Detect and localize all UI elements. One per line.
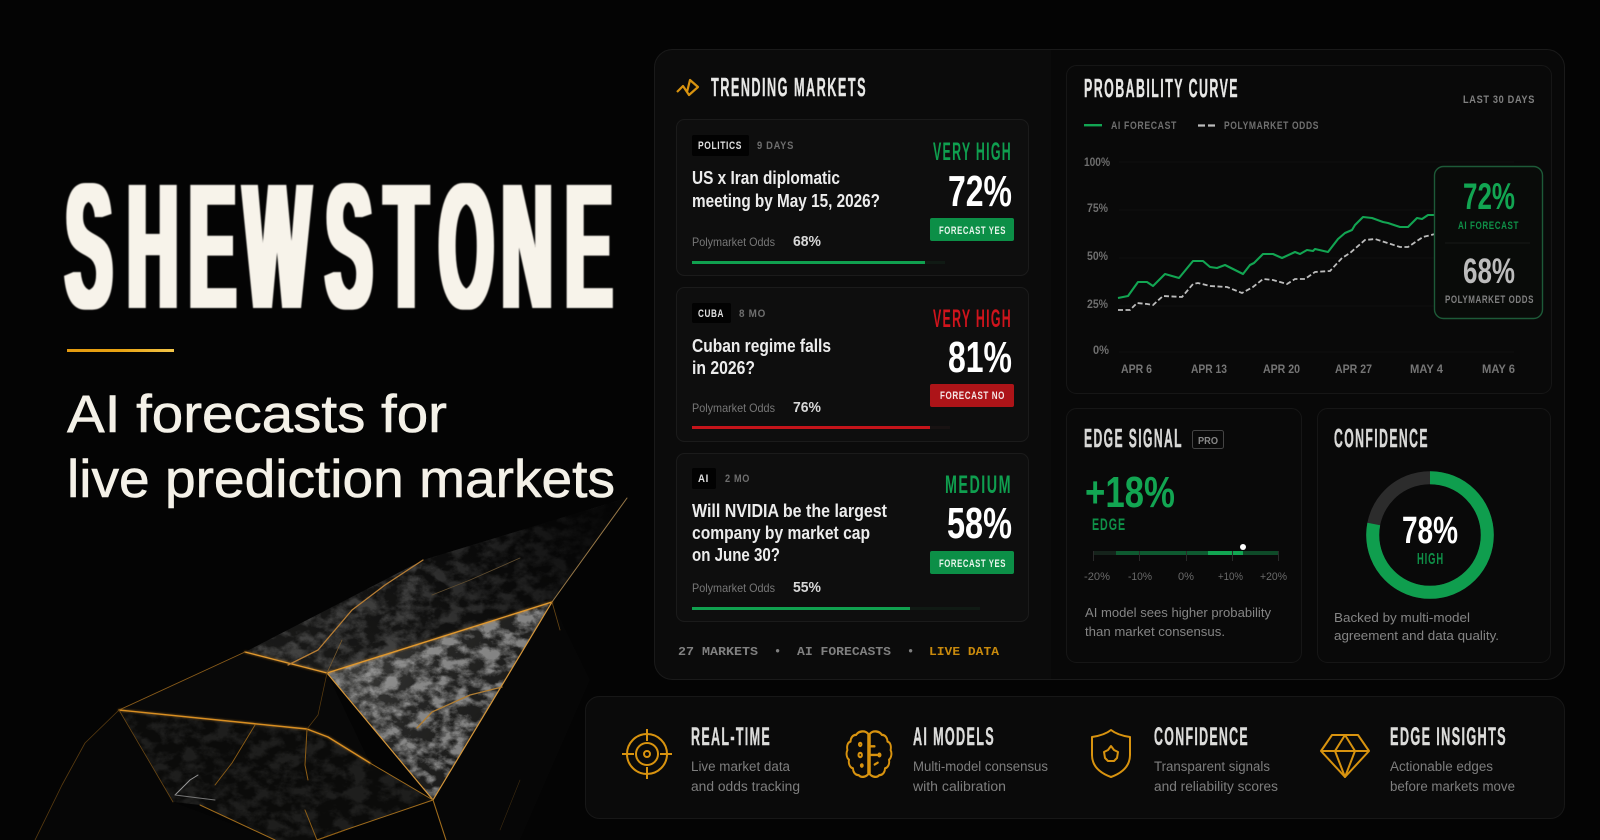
panel: trending markets: TRENDING MARKETS [711,72,867,102]
footer status line: AI FORECASTS [797,645,891,659]
title: SHEWSTONE: SHEWSTONE [66,146,612,346]
card: US x Iran [676,120,1028,276]
card: Cuba: 76% [793,399,821,416]
edge scale: +20% [1260,571,1287,583]
icon: trend zigzag [677,80,698,95]
card: NVIDIA: 2 MO [725,473,750,485]
card: NVIDIA: on June 30? [692,545,780,565]
feature: AI models: AI MODELS [913,723,995,751]
legend: AI FORECAST [1111,120,1177,132]
panel: edge signal [1066,408,1302,662]
line chart: APR 13 [1191,364,1227,376]
card: Cuba: CUBA [698,308,724,320]
panel: probability curve [1066,66,1552,394]
line chart: APR 27 [1335,364,1372,376]
legend [1084,120,1319,132]
icon: target [622,729,672,779]
card: Cuba: 81% [948,333,1012,382]
card: US x Iran: Polymarket Odds [692,235,775,249]
confidence description [1334,610,1499,643]
footer status line [678,645,1000,659]
edge scale: 0% [1178,571,1194,583]
feature: real-time [622,723,800,794]
panel: trending markets [676,72,1028,659]
card: Cuba: VERY HIGH [933,305,1012,333]
card: Cuba: FORECAST NO [940,390,1005,402]
card: US x Iran: 68% [793,233,821,250]
footer status line: • [907,645,914,659]
callout: current values: 68% [1463,252,1515,291]
card: US x Iran: VERY HIGH [933,138,1012,166]
illustration: cracked obsidian stone with gold veins [35,495,630,840]
feature: real-time: and odds tracking [691,779,800,794]
callout: current values: AI FORECAST [1458,220,1519,232]
edge scale: -10% [1128,571,1152,583]
line chart: MAY 6 [1482,364,1515,376]
tagline [67,385,615,509]
card: NVIDIA: MEDIUM [945,471,1012,499]
line chart: 100% [1084,157,1110,169]
feature: confidence: and reliability scores [1154,779,1278,794]
card: NVIDIA: AI [698,473,709,485]
callout: current values: POLYMARKET ODDS [1445,294,1534,306]
tagline: live prediction markets [67,450,615,509]
main dashboard panel [654,50,1564,680]
panel: confidence [1318,408,1550,662]
card: NVIDIA: Polymarket Odds [692,581,775,595]
feature: AI models: with calibration [912,779,1006,794]
series: polymarket odds [1118,234,1435,310]
line chart: 0% [1093,345,1109,357]
card: NVIDIA: 55% [793,579,821,596]
callout: current values: 72% [1463,176,1515,217]
card: Cuba: in 2026? [692,358,755,378]
line chart: 50% [1087,251,1108,263]
card: Cuba: Cuban regime falls [692,336,831,356]
icon: brain [847,731,891,777]
card: Cuba: Polymarket Odds [692,401,775,415]
legend: POLYMARKET ODDS [1224,120,1319,132]
panel: probability curve: PROBABILITY CURVE [1084,73,1239,103]
card: US x Iran: 72% [948,167,1012,216]
accent rule [67,349,174,352]
card: NVIDIA: Will NVIDIA be the largest [692,501,887,521]
edge description: AI model sees higher probability [1085,605,1271,620]
line chart [1084,157,1515,376]
confidence description: Backed by multi-model [1334,610,1470,625]
donut gauge 78%: 78% [1402,510,1458,552]
card: US x Iran: meeting by May 15, 2026? [692,191,880,211]
confidence description: agreement and data quality. [1334,628,1499,643]
feature: real-time: Live market data [691,759,790,774]
panel: feature strip [586,696,1564,818]
edge scale [1084,544,1287,583]
card: NVIDIA: 58% [947,499,1012,548]
feature: edge insights: before markets move [1390,779,1515,794]
donut gauge 78%: HIGH [1417,551,1444,568]
edge label: EDGE [1092,515,1126,534]
edge scale: -20% [1084,571,1110,583]
feature: AI models [847,723,1048,794]
feature: confidence [1092,723,1278,794]
line chart: APR 6 [1121,364,1152,376]
card: US x Iran: FORECAST YES [939,225,1006,237]
feature: confidence: Transparent signals [1154,759,1270,774]
badge: pro [1192,430,1224,448]
line chart: 75% [1087,203,1108,215]
panel: confidence: CONFIDENCE [1334,423,1429,453]
callout: current values [1434,166,1542,318]
panel: edge signal: EDGE SIGNAL [1084,423,1183,453]
card: NVIDIA: company by market cap [692,523,870,543]
donut gauge 78% [1373,478,1487,592]
icon: shield [1092,730,1130,777]
badge: pro: PRO [1198,435,1218,447]
icon: diamond [1321,735,1369,777]
date range: LAST 30 DAYS [1463,94,1535,106]
series: AI forecast [1118,215,1435,298]
feature: AI models: Multi-model consensus [913,759,1048,774]
card: US x Iran: US x Iran diplomatic [692,168,840,188]
line chart: MAY 4 [1410,364,1444,376]
card: NVIDIA [676,454,1028,622]
edge description [1085,605,1271,639]
card: US x Iran: 9 DAYS [757,140,794,152]
edge description: than market consensus. [1085,624,1225,639]
feature: edge insights [1321,723,1515,794]
feature: real-time: REAL-TIME [691,723,771,751]
edge value: +18% [1085,468,1175,517]
card: US x Iran: POLITICS [698,140,742,152]
card: Cuba [676,288,1028,442]
feature: confidence: CONFIDENCE [1154,723,1249,751]
card: Cuba: 8 MO [739,308,766,320]
footer status line: 27 MARKETS [678,645,758,659]
card: NVIDIA: FORECAST YES [939,558,1006,570]
footer status line: • [774,645,781,659]
tagline: AI forecasts for [67,385,447,444]
footer status line: LIVE DATA [929,645,1000,659]
feature: edge insights: Actionable edges [1390,759,1493,774]
line chart: APR 20 [1263,364,1300,376]
line chart: 25% [1087,299,1108,311]
edge scale: +10% [1218,571,1243,583]
